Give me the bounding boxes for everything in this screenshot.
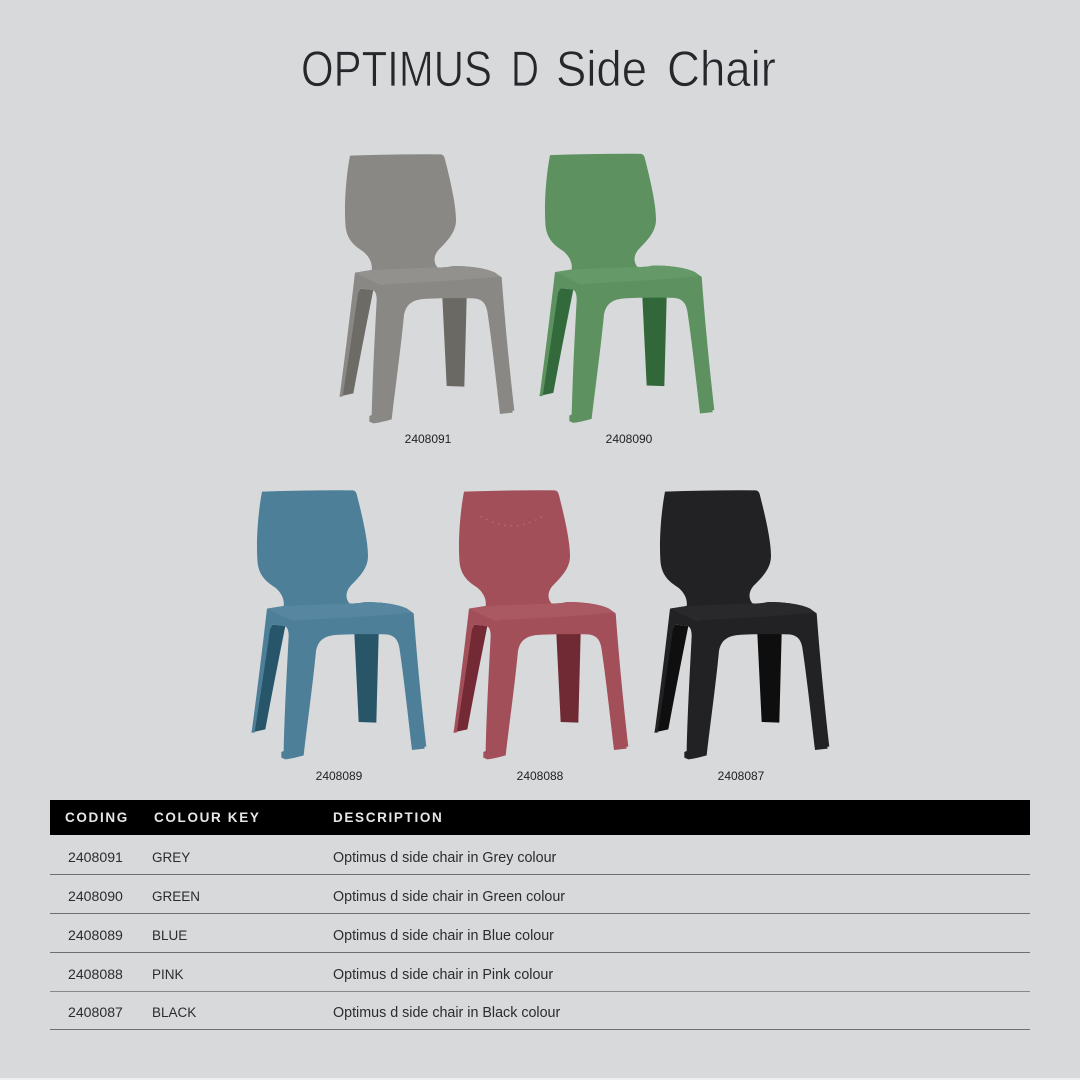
table row: blue: Optimus d side chair in Blue colour — [333, 928, 554, 944]
table row: grey: 2408091 — [68, 849, 123, 865]
title: OPTIMUS — [301, 41, 492, 97]
table header: DESCRIPTION — [333, 810, 443, 825]
table row: blue: 2408089 — [68, 927, 123, 943]
title — [301, 41, 776, 97]
chair: black 2408087 — [654, 490, 829, 759]
caption: 2408088: 2408088 — [517, 769, 564, 783]
chair: pink 2408088 — [453, 490, 628, 759]
table row: blue: BLUE — [152, 928, 187, 943]
table row: blue — [50, 914, 1030, 953]
chair: green 2408090 — [539, 154, 714, 423]
table row: green: GREEN — [152, 889, 200, 904]
table row: green — [50, 875, 1030, 914]
table header: CODING — [65, 810, 129, 825]
title: D — [511, 41, 539, 97]
table row: black: 2408087 — [68, 1004, 123, 1020]
chair: grey 2408091 — [339, 154, 514, 423]
table row: green: Optimus d side chair in Green colour — [333, 889, 565, 905]
table row: grey — [50, 836, 1030, 875]
table row: pink: PINK — [152, 967, 184, 982]
caption: 2408087: 2408087 — [718, 769, 765, 783]
logo dots on backrest — [481, 515, 544, 526]
table row: green: 2408090 — [68, 888, 123, 904]
table row: black: Optimus d side chair in Black colour — [333, 1005, 560, 1021]
title: Side — [556, 41, 647, 97]
table row: pink: Optimus d side chair in Pink colour — [333, 967, 553, 983]
table header: COLOUR KEY — [154, 810, 261, 825]
table row: black — [50, 991, 1030, 1030]
table header — [50, 800, 1030, 835]
caption: 2408089: 2408089 — [316, 769, 363, 783]
title: Chair — [667, 41, 776, 97]
caption: 2408090: 2408090 — [606, 432, 653, 446]
table row: grey: Optimus d side chair in Grey colour — [333, 850, 556, 866]
bottom edge strip — [0, 1078, 1080, 1080]
caption: 2408091: 2408091 — [405, 432, 452, 446]
table row: pink — [50, 953, 1030, 992]
table row: grey: GREY — [152, 850, 190, 865]
table row: black: BLACK — [152, 1005, 196, 1020]
chair: blue 2408089 — [251, 490, 426, 759]
table row: pink: 2408088 — [68, 966, 123, 982]
